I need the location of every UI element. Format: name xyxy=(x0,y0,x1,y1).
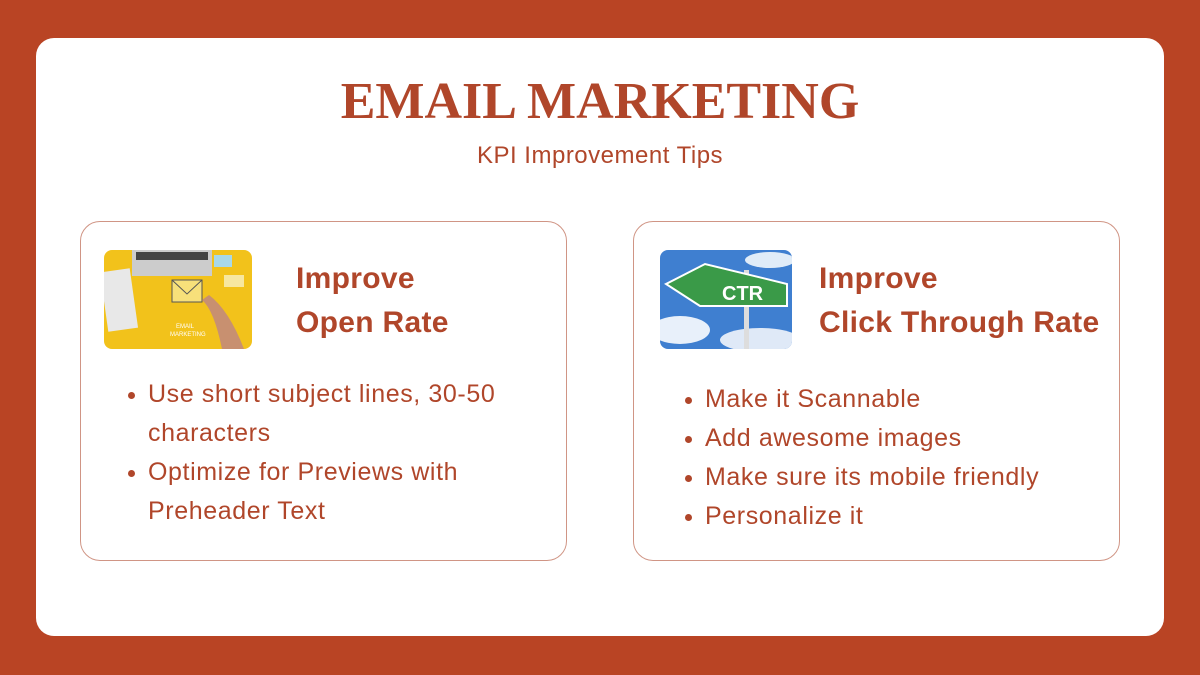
heading: Click Through Rate xyxy=(819,306,1099,339)
image: email marketing desk: MARKETING xyxy=(170,332,206,338)
bullet list xyxy=(128,380,495,525)
bullet list: Make sure its mobile friendly xyxy=(705,463,1039,491)
image: CTR sign xyxy=(660,250,792,349)
bullet list: Add awesome images xyxy=(705,424,962,452)
heading: Open Rate xyxy=(296,306,449,339)
image: CTR sign: CTR xyxy=(722,283,764,305)
image: email marketing desk: EMAIL xyxy=(176,324,195,330)
bullet list xyxy=(685,385,1039,530)
heading xyxy=(819,262,1099,339)
title: EMAIL MARKETING xyxy=(341,73,859,130)
image: email marketing desk xyxy=(104,250,252,349)
heading: Improve xyxy=(296,262,415,295)
bullet list: Use short subject lines, 30-50 characters xyxy=(148,380,495,447)
bullet list: Make it Scannable xyxy=(705,385,921,413)
heading xyxy=(296,262,449,339)
bullet list: Optimize for Previews with Preheader Text xyxy=(148,458,458,525)
heading: Improve xyxy=(819,262,938,295)
panel: open rate xyxy=(80,221,567,561)
subtitle: KPI Improvement Tips xyxy=(477,142,723,169)
bullet list: Personalize it xyxy=(705,502,863,530)
panel: click through rate xyxy=(633,221,1120,561)
